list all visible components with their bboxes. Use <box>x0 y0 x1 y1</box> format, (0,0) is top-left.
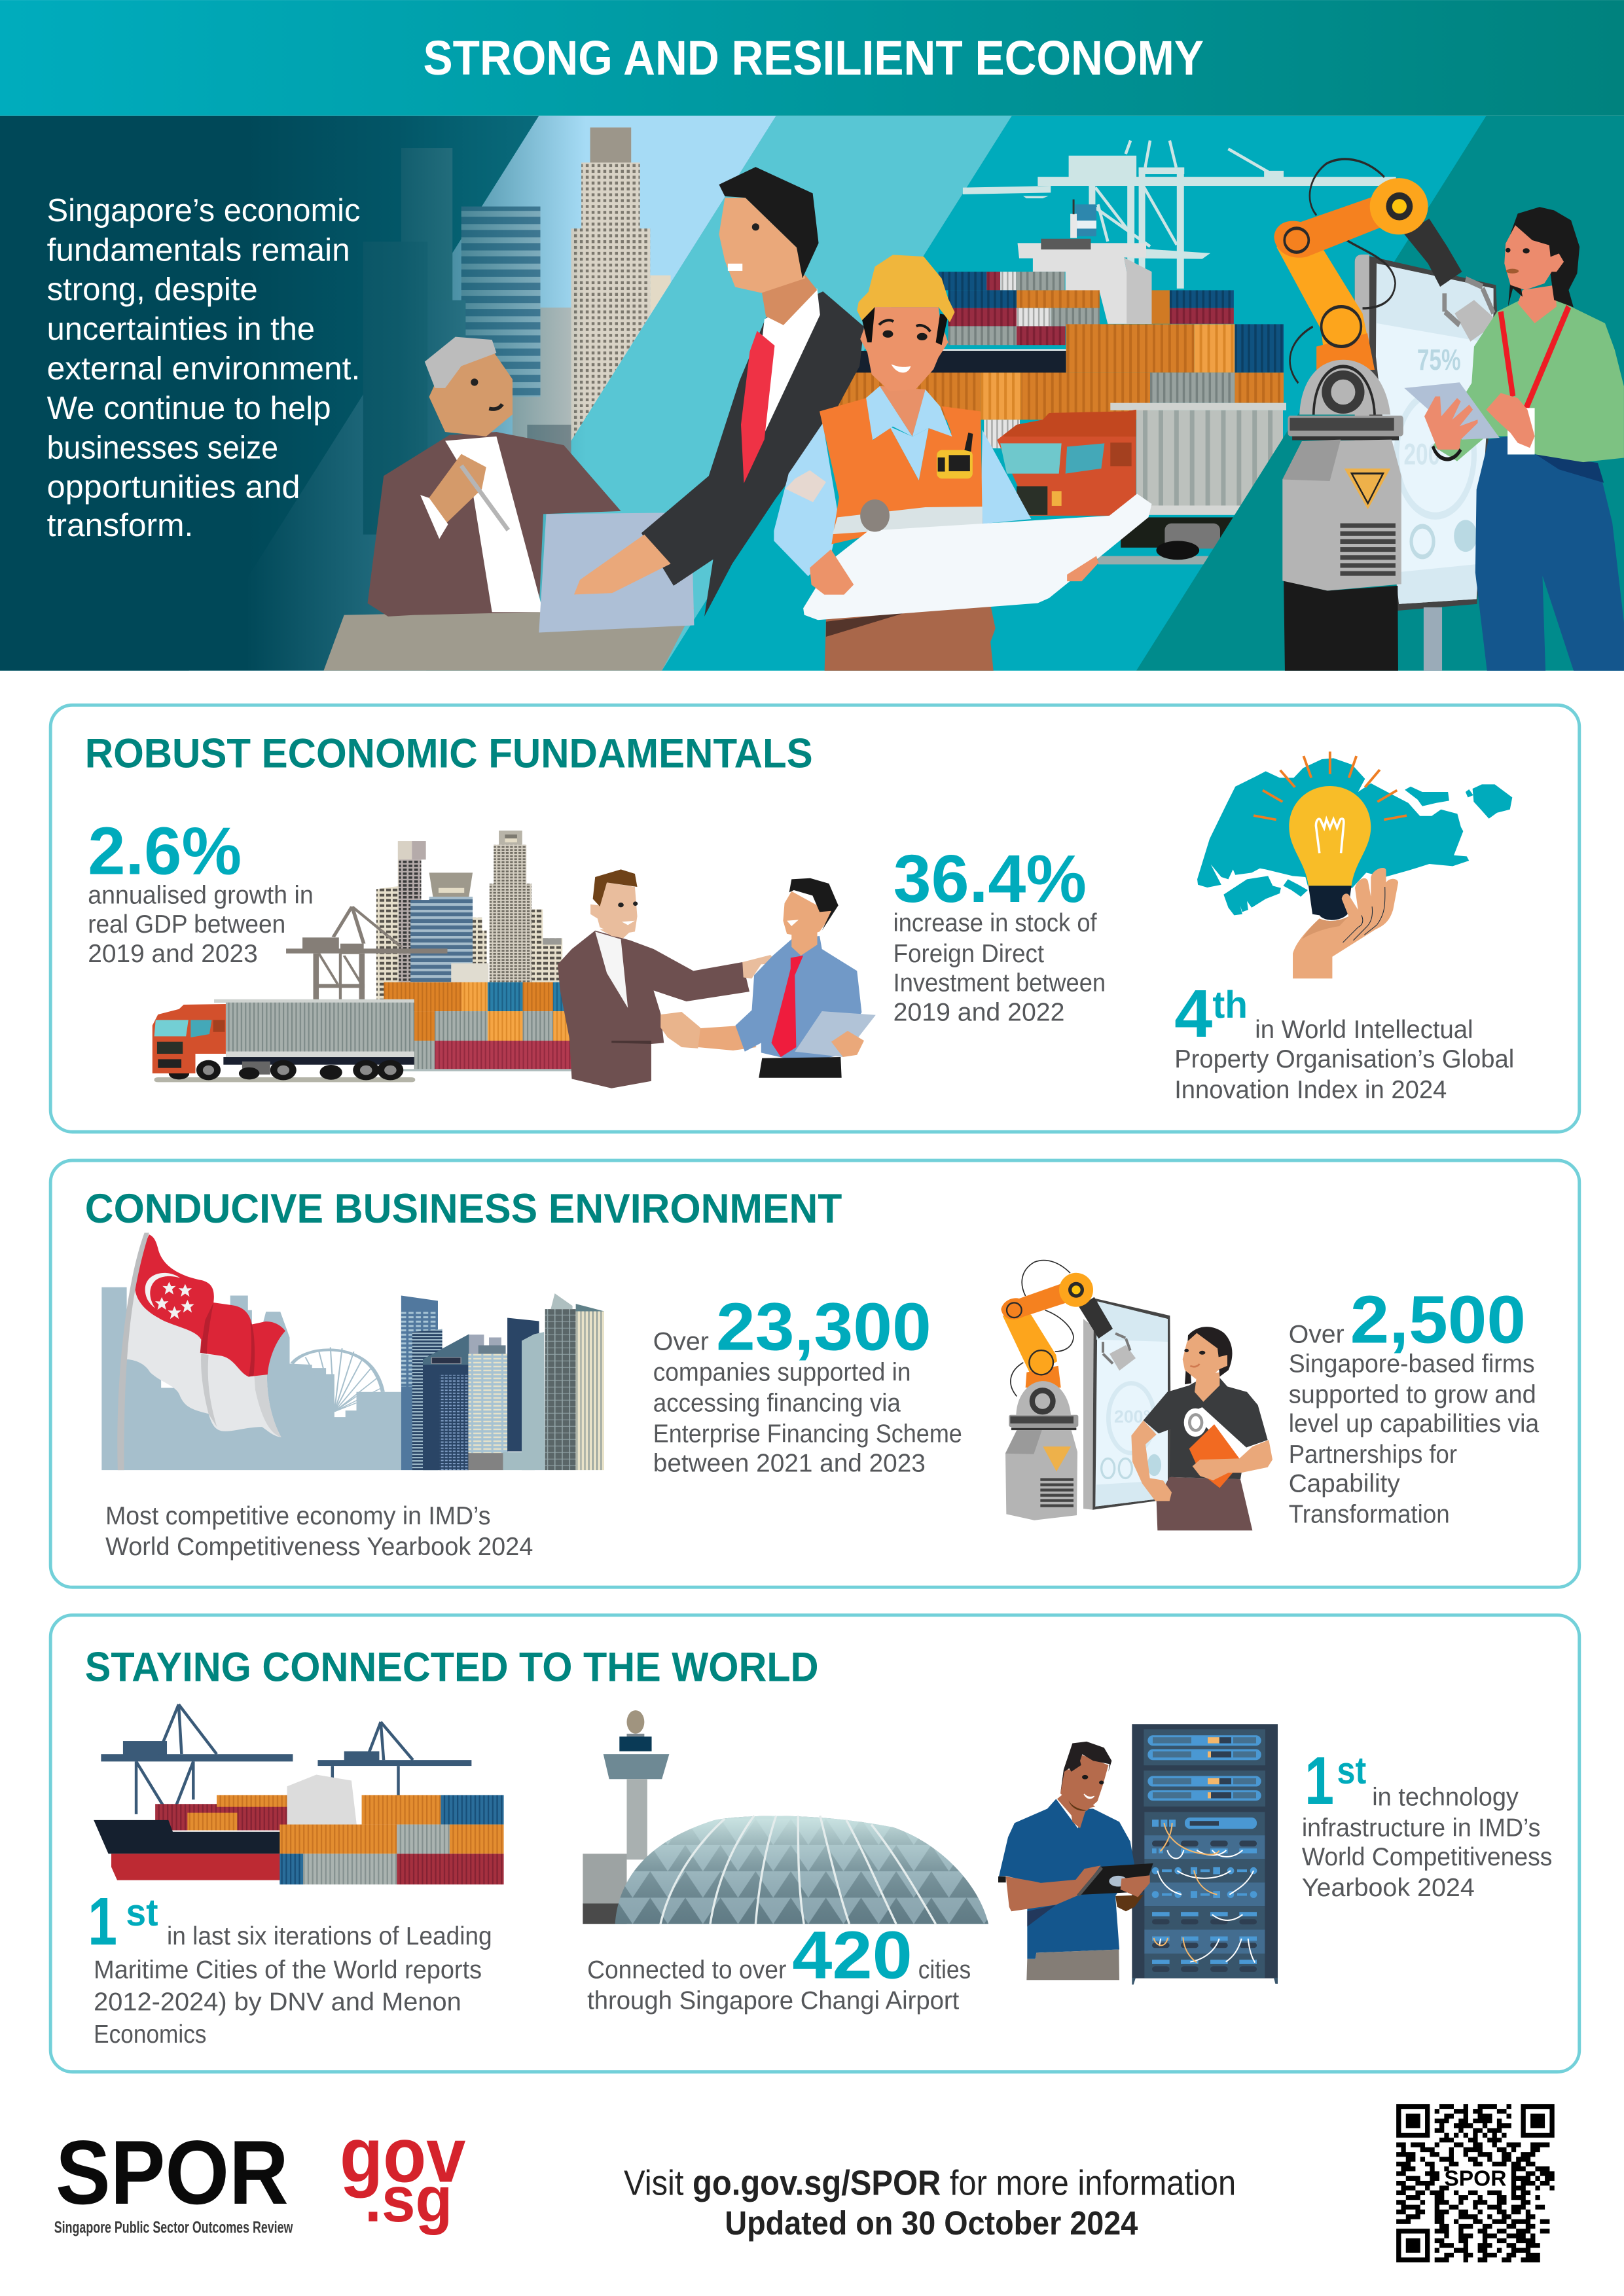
stat: gdp growth: 2019 and 2023 <box>88 940 258 968</box>
logo: SPOR: SPOR <box>56 2122 289 2223</box>
logo: SPOR: Singapore Public Sector Outcomes Review <box>54 2219 293 2237</box>
engineer and server rack illustration <box>998 1724 1278 1984</box>
stat: partnerships for capability transformation: 2,500 <box>1350 1282 1526 1357</box>
intro text: transform. <box>47 507 193 543</box>
singapore flag and skyline illustration <box>101 1232 604 1470</box>
stat: global innovation index: 4 <box>1174 976 1212 1051</box>
header banner <box>0 0 1624 116</box>
visit information: Updated on 30 October 2024 <box>725 2204 1138 2242</box>
laptop <box>539 512 694 633</box>
stat: leading maritime cities: Maritime Cities of the World reports <box>94 1956 482 1984</box>
woman with orange folder <box>1131 1327 1272 1530</box>
stat: partnerships for capability transformation: Singapore-based firms <box>1289 1350 1535 1378</box>
robot arm, screen and woman with folder illustration <box>1001 1261 1272 1530</box>
display screen: 75% <box>1417 344 1461 376</box>
stat: enterprise financing scheme: Enterprise Financing Scheme <box>653 1420 962 1448</box>
stat: leading maritime cities: 2012-2024) by DNV and Menon <box>94 1988 461 2017</box>
footer <box>54 2104 1555 2262</box>
intro text: We continue to help <box>47 390 331 426</box>
panel: staying connected to the world <box>50 1615 1579 2072</box>
port cranes and ship illustration <box>94 1704 504 1884</box>
stat: foreign direct investment: Investment between <box>893 969 1106 997</box>
intro text <box>47 192 360 543</box>
stat: global innovation index: Innovation Index in 2024 <box>1174 1076 1447 1104</box>
seated executive <box>368 337 621 617</box>
stat: partnerships for capability transformation: level up capabilities via <box>1289 1410 1539 1438</box>
woman with tablet <box>1404 207 1624 674</box>
stat: foreign direct investment <box>893 841 1106 1026</box>
stat: leading maritime cities: Economics <box>94 2020 206 2049</box>
caption: most competitive economy <box>105 1502 533 1561</box>
heading: CONDUCIVE BUSINESS ENVIRONMENT <box>85 1186 842 1232</box>
stat: foreign direct investment: Foreign Direct <box>893 940 1044 968</box>
intro text: strong, despite <box>47 272 258 308</box>
stat: changi airport connectivity: cities <box>918 1956 971 1984</box>
icon: singapore map with lightbulb and hand <box>1197 751 1512 978</box>
stat: changi airport connectivity: Connected to over <box>587 1956 786 1984</box>
dark teal band edge <box>1136 116 1624 671</box>
stat: enterprise financing scheme: between 2021 and 2023 <box>653 1449 926 1477</box>
port crane <box>286 906 448 1000</box>
stat: partnerships for capability transformation: Over <box>1289 1321 1344 1349</box>
stat: foreign direct investment: 2019 and 2022 <box>893 998 1064 1026</box>
intro text: opportunities and <box>47 469 300 505</box>
display screen <box>1083 1298 1171 1510</box>
changi control tower and jewel dome illustration <box>583 1710 988 1924</box>
stat: changi airport connectivity: through Singapore Changi Airport <box>587 1986 959 2015</box>
stat: foreign direct investment: increase in stock of <box>893 909 1097 937</box>
stat: global innovation index: Property Organisation’s Global <box>1174 1045 1514 1073</box>
intro text: Singapore’s economic <box>47 192 360 228</box>
table <box>323 607 694 671</box>
stat: technology infrastructure: World Competitiveness <box>1302 1843 1552 1871</box>
heading: STAYING CONNECTED TO THE WORLD <box>85 1644 819 1690</box>
stat: technology infrastructure: 1 <box>1305 1743 1334 1818</box>
stat: foreign direct investment: 36.4% <box>893 841 1087 916</box>
visit information: Visit go.gov.sg/SPOR for more information <box>624 2164 1236 2203</box>
intro text: external environment. <box>47 350 360 386</box>
server rack <box>1132 1724 1278 1984</box>
stat: technology infrastructure <box>1302 1743 1552 1902</box>
stat: global innovation index: in World Intellectual <box>1255 1016 1473 1044</box>
logo: gov.sg <box>340 2112 465 2235</box>
stacked containers <box>384 982 572 1071</box>
heading: ROBUST ECONOMIC FUNDAMENTALS <box>85 730 813 776</box>
stat: enterprise financing scheme: accessing financing via <box>653 1390 901 1418</box>
stat: enterprise financing scheme: 23,300 <box>716 1289 931 1365</box>
robot arm <box>1274 178 1498 674</box>
construction worker and blueprint <box>774 255 1151 674</box>
skyline, port, truck and handshake illustration <box>153 831 876 1088</box>
QR code: SPOR <box>1444 2166 1507 2191</box>
stat: partnerships for capability transformation: Partnerships for <box>1289 1441 1457 1469</box>
caption: most competitive economy: World Competitiveness Yearbook 2024 <box>105 1533 533 1561</box>
stat: technology infrastructure: infrastructure in IMD’s <box>1302 1814 1540 1842</box>
stat: leading maritime cities <box>88 1884 492 2049</box>
QR code <box>1396 2104 1555 2262</box>
panel: robust economic fundamentals <box>50 705 1579 1132</box>
stat: changi airport connectivity: 420 <box>792 1917 912 1992</box>
stat: technology infrastructure: in technology <box>1372 1783 1519 1811</box>
stat: gdp growth: real GDP between <box>88 910 285 939</box>
stat: gdp growth: 2.6% <box>88 814 242 889</box>
intro text: uncertainties in the <box>47 311 315 347</box>
stat: technology infrastructure: st <box>1337 1749 1366 1792</box>
stat: changi airport connectivity <box>587 1917 971 2015</box>
logo: gov.sg: gov <box>340 2112 465 2198</box>
stat: leading maritime cities: in last six iterations of Leading <box>167 1922 492 1950</box>
hero illustration panel <box>0 116 1624 675</box>
stat: gdp growth: annualised growth in <box>88 881 314 909</box>
engineer with tablet <box>998 1742 1153 1980</box>
display screen, robot arm and woman with tablet <box>1274 159 1624 675</box>
stat: enterprise financing scheme: companies supported in <box>653 1359 911 1387</box>
stat: leading maritime cities: st <box>126 1892 158 1934</box>
panel: conducive business environment <box>50 1160 1579 1587</box>
stat: technology infrastructure: Yearbook 2024 <box>1302 1874 1475 1902</box>
truck <box>153 999 415 1082</box>
dark left gradient overlay <box>0 116 586 671</box>
businessman in blue shirt <box>660 878 876 1078</box>
intro text: fundamentals remain <box>47 232 350 268</box>
logo: gov.sg: .sg <box>365 2163 452 2235</box>
stat: partnerships for capability transformation: Capability <box>1289 1470 1400 1498</box>
stat: enterprise financing scheme: Over <box>653 1328 709 1356</box>
port crane, ship, containers and truck <box>831 141 1396 564</box>
stat: partnerships for capability transformation <box>1289 1282 1539 1529</box>
businessman <box>574 167 864 617</box>
visit information <box>624 2164 1236 2242</box>
stat: partnerships for capability transformation: supported to grow and <box>1289 1380 1536 1408</box>
display screen <box>1355 255 1497 675</box>
skyline <box>376 831 562 999</box>
display screen: 200 <box>1404 439 1440 471</box>
title: STRONG AND RESILIENT ECONOMY <box>424 31 1204 85</box>
businessman in brown suit <box>558 869 778 1088</box>
robot arm <box>1001 1273 1136 1520</box>
stat: global innovation index <box>1174 976 1514 1104</box>
stat: enterprise financing scheme <box>653 1289 962 1477</box>
stat: gdp growth <box>88 814 314 968</box>
caption: most competitive economy: Most competitive economy in IMD’s <box>105 1502 490 1530</box>
stat: partnerships for capability transformation: Transformation <box>1289 1501 1450 1529</box>
intro text: businesses seize <box>47 429 278 465</box>
stat: leading maritime cities: 1 <box>88 1884 117 1959</box>
display screen: 200° <box>1114 1407 1150 1426</box>
hero skyline <box>363 128 671 535</box>
stat: global innovation index: th <box>1212 984 1248 1026</box>
